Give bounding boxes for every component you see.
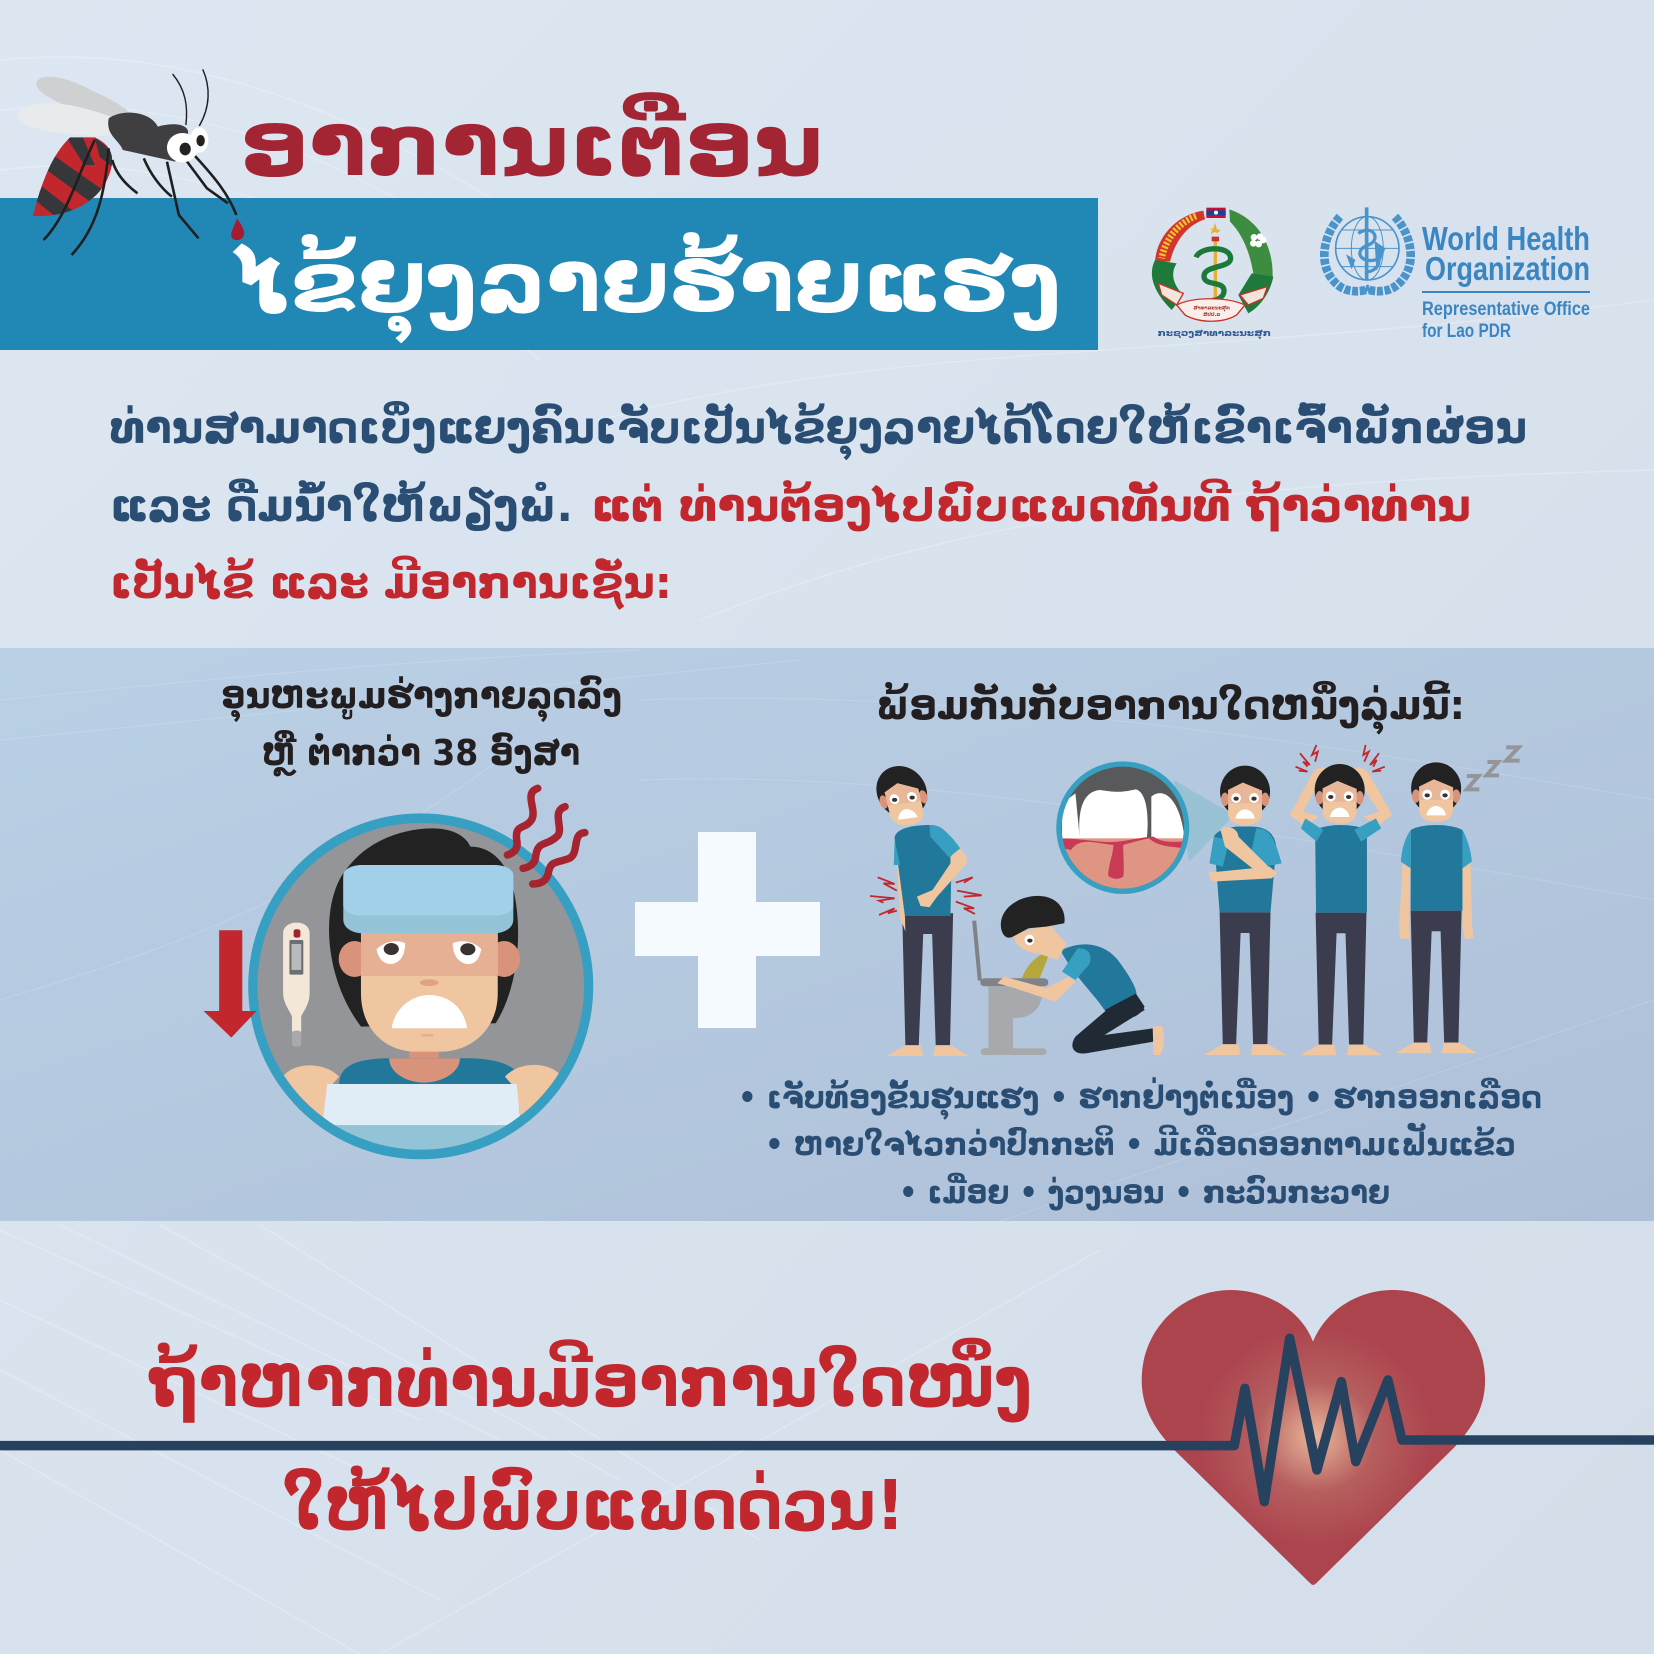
closing message <box>148 1338 1032 1546</box>
logo: ministry of health: ກະຊວງສາທາລະນະສຸກ <box>1158 329 1271 340</box>
intro paragraph: ແຕ່ ທ່ານຕ້ອງໄປພົບແພດທັນທີ ຖ້າວ່າທ່ານ <box>591 478 1471 532</box>
heading: accompanying symptoms: ພ້ອມກັນກັບອາການໃດຫນຶ່ງລຸ່ມນີ້: <box>876 679 1465 735</box>
heading: temperature drop <box>221 675 622 776</box>
symptom list: • ເມື່ອຍ • ງ່ວງນອນ • ກະວົນກະວາຍ <box>899 1172 1390 1211</box>
heading: temperature drop: ຫຼື ຕໍ່າກວ່າ 38 ອົງສາ <box>262 730 580 776</box>
icon: heart with pulse line <box>0 1290 1654 1585</box>
figure: bleeding gums magnifier <box>1056 761 1234 894</box>
logo: WHO wordmark <box>1422 220 1590 342</box>
figure: headache <box>1290 745 1392 1055</box>
illustration: symptom figures <box>870 745 1520 1056</box>
symptom list <box>738 1076 1542 1211</box>
logo: WHO emblem <box>1324 207 1411 291</box>
logo: WHO wordmark: Organization <box>1425 250 1590 287</box>
title band <box>0 198 1098 350</box>
symptom list: • ຫາຍໃຈໄວກວ່າປົກກະຕິ • ມີເລືອດອອກຕາມເຟັນແຂ້ວ <box>765 1120 1516 1163</box>
intro paragraph <box>110 400 1527 611</box>
logo: WHO wordmark: Representative Office <box>1422 299 1590 320</box>
panel texture <box>0 650 1654 1221</box>
icon: thermometer <box>283 923 310 1047</box>
figure: abdominal pain <box>870 763 982 1056</box>
logo: WHO wordmark: World Health <box>1422 220 1590 257</box>
logo: ministry of health <box>1152 208 1273 340</box>
icon: heat waves <box>507 788 585 884</box>
intro paragraph: ທ່ານສາມາດເບິ່ງແຍງຄົນເຈັບເປັນໄຂ້ຍຸງລາຍໄດ້ໂດຍໃຫ້ເຂົາເຈົ້າພັກຜ່ອນ <box>110 400 1527 461</box>
intro paragraph: ແລະ ດື່ມນໍ້າໃຫ້ພຽງພໍ. <box>110 478 573 532</box>
icon: down arrow <box>204 930 257 1038</box>
icon: plus sign <box>635 832 820 1028</box>
title line 2: ໄຂ້ຍຸງລາຍຮ້າຍແຮງ <box>232 232 1061 343</box>
closing message: ໃຫ້ໄປພົບແພດດ່ວນ! <box>283 1465 905 1546</box>
intro paragraph: ເປັນໄຂ້ ແລະ ມີອາການເຊັ່ນ: <box>110 555 672 611</box>
figure: vomiting over toilet <box>972 896 1164 1055</box>
figure: rash on arm <box>1204 766 1286 1055</box>
closing message: ຖ້າຫາກທ່ານມີອາການໃດໜຶ່ງ <box>148 1338 1032 1423</box>
icon: mosquito <box>18 69 244 255</box>
panel: symptoms band <box>0 648 1654 1221</box>
logo: WHO wordmark: for Lao PDR <box>1422 321 1511 342</box>
figure: drowsy <box>1395 747 1520 1053</box>
logo: ministry of health: ສາທາລະນະສຸກ <box>1193 304 1230 312</box>
logo: ministry of health: ສປປ.ລ <box>1203 311 1220 318</box>
symptom list: • ເຈັບທ້ອງຂັ້ນຮຸນແຮງ • ຮາກຢ່າງຕໍ່ເນື່ອງ • ຮາກອອກເລືອດ <box>738 1076 1542 1121</box>
title line 1: ອາການເຕືອນ <box>240 93 823 196</box>
illustration: feverish patient <box>204 788 593 1159</box>
heading: temperature drop: ອຸນຫະພູມຮ່າງກາຍລຸດລົງ <box>221 675 622 723</box>
